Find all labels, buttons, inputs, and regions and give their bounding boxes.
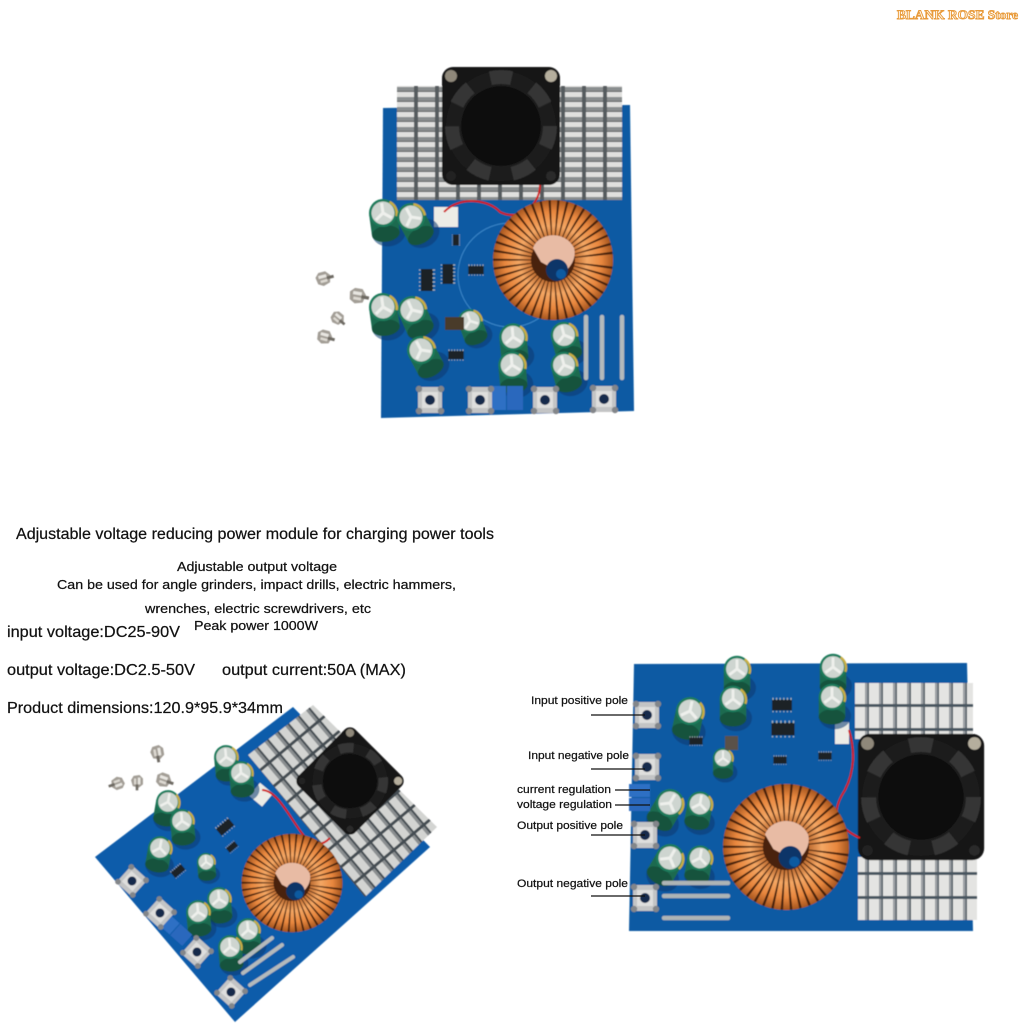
heatsink <box>397 86 622 200</box>
callout: input positive pole: Input positive pole <box>531 695 628 707</box>
capacitors <box>367 195 591 400</box>
cooling fan <box>293 724 407 838</box>
callout: voltage regulation <box>517 799 650 811</box>
capacitors <box>641 654 852 897</box>
heatsink upper <box>855 683 973 739</box>
adjustment potentiometers <box>490 386 523 410</box>
feature description: wrenches, electric screwdrivers, etc <box>144 602 371 616</box>
integrated circuits <box>170 817 239 879</box>
power terminals <box>631 701 661 912</box>
pcb traces <box>458 223 562 327</box>
heatsink lower <box>858 857 977 920</box>
adjustment potentiometers <box>158 913 192 946</box>
callout: voltage regulation: voltage regulation <box>517 799 612 811</box>
power terminals <box>114 863 249 1010</box>
toroid inductor <box>242 834 342 932</box>
callout: input negative pole: Input negative pole <box>528 750 629 762</box>
adjustment potentiometers <box>629 784 650 811</box>
callout: output positive pole: Output positive pole <box>517 820 623 832</box>
heatsink <box>248 705 437 897</box>
integrated circuits <box>689 698 832 765</box>
capacitors <box>143 744 267 977</box>
circuit board <box>381 105 634 418</box>
cooling fan <box>442 67 560 185</box>
specifications: output current:50A (MAX) <box>222 662 406 679</box>
shunt resistors <box>664 883 728 918</box>
feature description <box>57 560 456 633</box>
integrated circuits <box>419 234 484 361</box>
feature description: Peak power 1000W <box>194 619 318 633</box>
shunt resistors <box>240 938 293 985</box>
specifications: Product dimensions:120.9*95.9*34mm <box>7 700 283 717</box>
toroid inductor <box>493 200 613 320</box>
power terminals <box>416 385 618 414</box>
cooling fan <box>858 734 984 860</box>
watermark: store name: BLANK ROSE Store <box>897 8 1018 22</box>
feature description: Can be used for angle grinders, impact drills, electric hammers, <box>57 578 456 592</box>
callout: output negative pole: Output negative pole <box>517 878 628 890</box>
callout: current regulation <box>517 784 650 796</box>
circuit board <box>95 707 430 1022</box>
callout: current regulation: current regulation <box>517 784 611 796</box>
product photo: angled view of module <box>95 705 437 1022</box>
fan connector and wires <box>434 185 540 227</box>
fan connector and wires <box>835 722 860 838</box>
loose screws, angled photo <box>107 744 176 792</box>
fan connector and wires <box>249 783 330 844</box>
product photo: annotated top-down view <box>629 654 984 931</box>
circuit board <box>629 663 973 931</box>
specifications: input voltage:DC25-90V <box>7 624 181 641</box>
callout: output positive pole <box>517 820 645 835</box>
callout: output negative pole <box>517 878 645 896</box>
shunt resistors <box>586 317 622 378</box>
toroid inductor <box>723 784 849 910</box>
callout: input negative pole <box>528 750 645 769</box>
callout: input positive pole <box>531 695 645 715</box>
product photo: top view of module <box>367 67 634 418</box>
specifications: output voltage:DC2.5-50V <box>7 662 196 679</box>
feature description: Adjustable output voltage <box>177 560 337 574</box>
specifications <box>7 624 406 717</box>
main heading: Adjustable voltage reducing power module for charging power tools <box>16 526 494 543</box>
loose screws, top photo <box>314 269 370 347</box>
